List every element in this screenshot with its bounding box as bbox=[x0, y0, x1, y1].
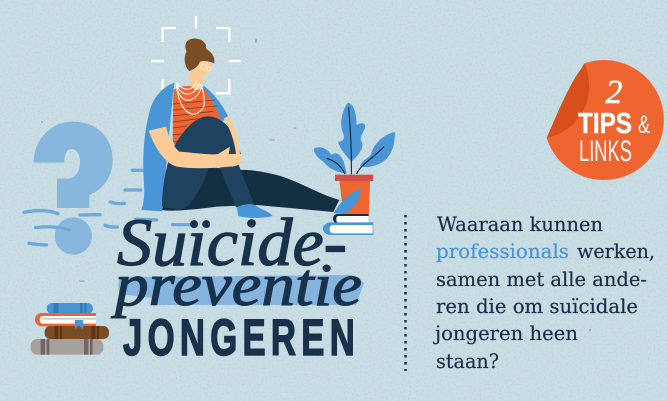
illustration: seated woman bbox=[141, 39, 339, 218]
sticker text: ampersand: & bbox=[638, 111, 650, 139]
cardigan bbox=[141, 83, 175, 211]
pot bbox=[339, 180, 370, 214]
hair bbox=[185, 39, 214, 71]
highlight band bbox=[118, 275, 364, 305]
striped shirt bbox=[173, 86, 240, 169]
intro text block: professionals bbox=[436, 240, 569, 263]
sticker number: 2 bbox=[606, 74, 622, 111]
intro text block: jongeren heen bbox=[433, 322, 578, 345]
icon: focus frame bbox=[151, 16, 241, 93]
books under pot bbox=[333, 214, 369, 223]
intro text block: staan? bbox=[436, 350, 499, 373]
arm bbox=[149, 127, 242, 168]
top blue book bbox=[47, 303, 93, 314]
front leg bbox=[162, 116, 254, 210]
sticker text: tips: TIPS bbox=[578, 108, 632, 140]
shoes bbox=[237, 204, 273, 218]
back leg bbox=[162, 167, 339, 212]
sticker: 2 tips & links bbox=[547, 60, 664, 180]
icon: question mark bbox=[34, 122, 113, 255]
bookmark bbox=[75, 320, 83, 329]
intro text block: Waaraan kunnen bbox=[437, 213, 603, 236]
curled corner bbox=[547, 64, 589, 138]
title line 2: preventie bbox=[111, 252, 362, 318]
brown book bbox=[45, 326, 109, 339]
necklace bbox=[177, 83, 204, 114]
dotted divider bbox=[404, 215, 407, 371]
sticker disc bbox=[547, 60, 664, 180]
intro text block bbox=[433, 213, 655, 373]
shoe at pot bbox=[334, 188, 361, 214]
title line 3: JONGEREN bbox=[123, 311, 360, 367]
speed lines bbox=[24, 170, 194, 245]
illustration: plant on books bbox=[314, 103, 395, 223]
intro text block: samen met alle ande- bbox=[436, 268, 647, 291]
title line 1: Suïcide- bbox=[117, 204, 347, 280]
intro text block: werken, bbox=[577, 240, 655, 263]
leaves bbox=[338, 103, 365, 162]
icon: stack of books bbox=[31, 303, 109, 355]
neck and face bbox=[190, 70, 204, 90]
glasses bbox=[201, 64, 211, 71]
title: Suïcide-preventie JONGEREN bbox=[111, 204, 364, 367]
grey book bbox=[31, 339, 103, 355]
intro text block: ren die om suïcidale bbox=[436, 295, 638, 318]
lower book under pot bbox=[323, 222, 373, 235]
orange book bbox=[35, 313, 96, 326]
sticker text: links: LINKS bbox=[579, 135, 632, 168]
